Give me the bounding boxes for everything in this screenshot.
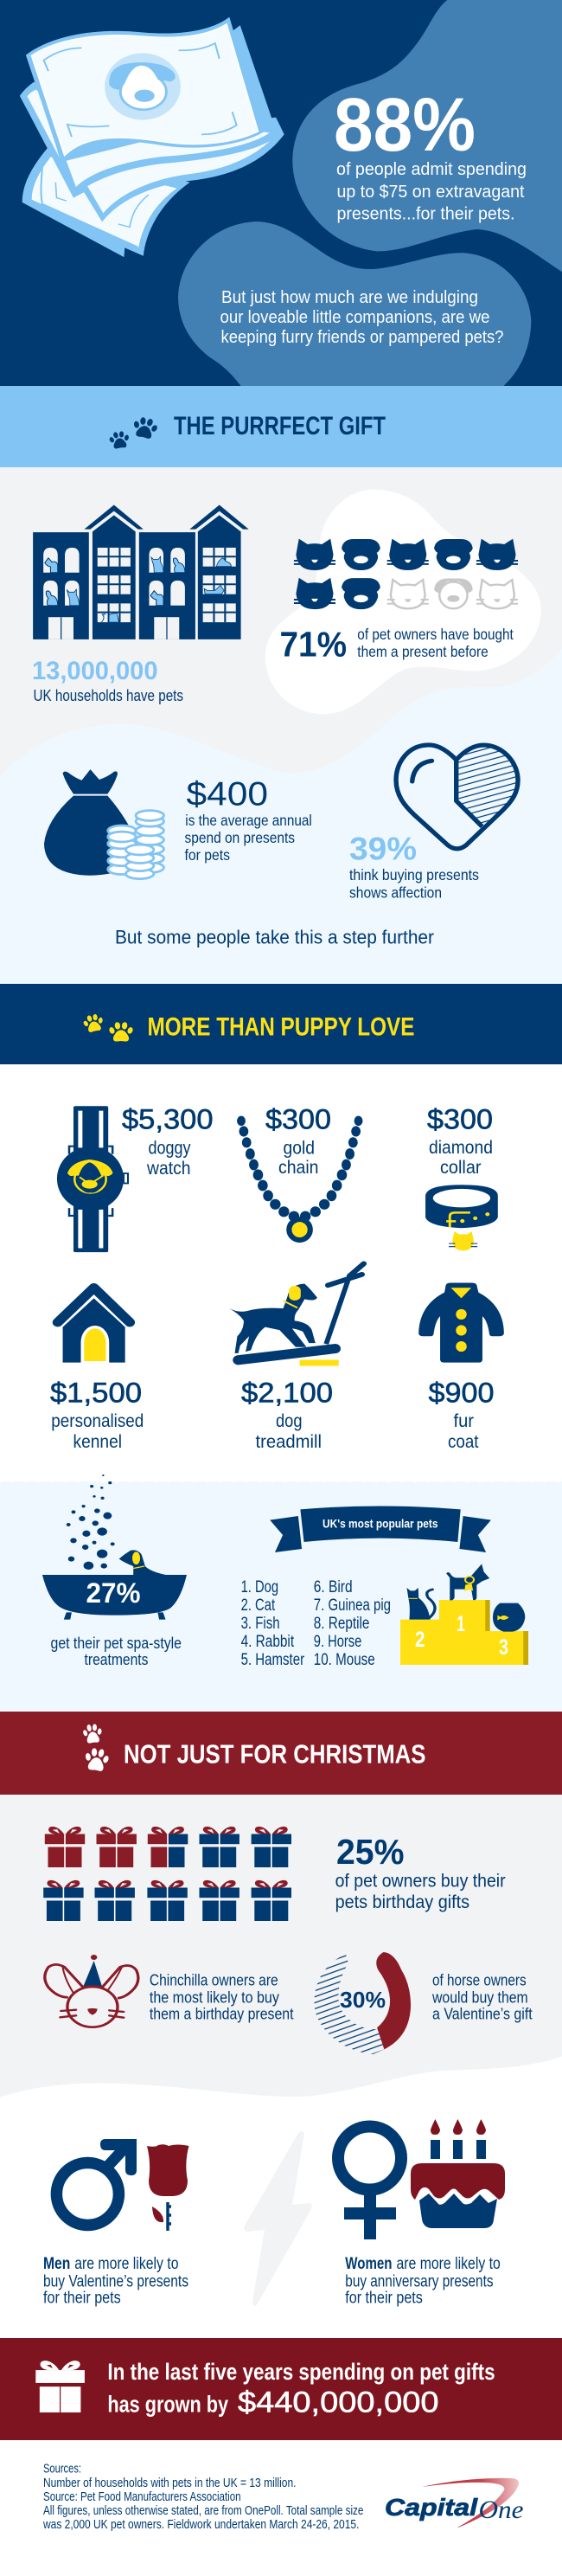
panel: luxury pet gifts	[0, 1064, 562, 1481]
panel: birthday and valentine stats	[0, 1795, 562, 2157]
icon: podium with pets: 1	[457, 1612, 465, 1636]
text: chinchilla owners: Chinchilla owners are	[150, 1971, 278, 1988]
transition sentence: But some people take this a step further	[115, 926, 434, 948]
stat: 400 dollars	[185, 775, 312, 864]
icon grid: cats and dogs 71 percent	[294, 539, 518, 609]
white blob	[265, 490, 541, 714]
stat: 25 percent: 25%	[336, 1832, 405, 1872]
icon: podium with pets: 3	[499, 1635, 508, 1660]
price: fur coat: fur	[453, 1410, 474, 1431]
price: diamond collar: diamond	[429, 1137, 493, 1158]
chart: 30 percent ring: 30%	[340, 1987, 386, 2013]
price: kennel: $1,500	[50, 1378, 142, 1409]
panel: sources: Source: Pet Food Manufacturers Association	[43, 2490, 241, 2504]
panel: sources: All figures, unless otherwise stated, are from OnePoll. Total sample size	[43, 2504, 363, 2518]
icon: half-hatched heart	[396, 745, 518, 849]
panel: sources: Sources:	[43, 2462, 81, 2476]
price: gold chain: chain	[278, 1157, 318, 1178]
price: gold chain	[265, 1104, 331, 1178]
panel: spa and popular pets	[0, 1474, 562, 1712]
text: horse owners: of horse owners	[432, 1971, 527, 1988]
panel: sources: Number of households with pets in the UK = 13 million.	[43, 2476, 296, 2490]
text: horse owners	[431, 1971, 533, 2022]
price: treadmill: treadmill	[256, 1431, 322, 1452]
ranked list of pets	[241, 1578, 391, 1669]
stat: 39 percent: shows affection	[349, 884, 442, 902]
icon: podium with pets	[400, 1564, 528, 1665]
ribbon banner: UK's most popular pets: UK's most popular pets	[323, 1516, 438, 1530]
text: women: Women	[345, 2255, 393, 2273]
price: kennel	[50, 1378, 144, 1452]
stat: 39 percent: 39%	[349, 831, 417, 867]
stat: 71 percent	[280, 625, 514, 665]
text: chinchilla owners	[150, 1971, 294, 2022]
text: women: are more likely to	[396, 2255, 501, 2273]
logo: Capital One: Capital	[385, 2494, 478, 2521]
icon: lightning bolt divider	[244, 2131, 312, 2306]
price: kennel: kennel	[73, 1431, 122, 1452]
price: gold chain: $300	[265, 1104, 331, 1135]
stat: 88 percent: presents...for their pets.	[337, 204, 515, 223]
ranked list of pets: 10. Mouse	[314, 1651, 375, 1669]
icon: white paws	[81, 1723, 111, 1772]
text: men: buy Valentine’s presents	[43, 2272, 188, 2290]
price: fur coat	[429, 1378, 495, 1452]
stat: 88 percent	[334, 83, 527, 223]
stat: 27 percent	[50, 1577, 182, 1668]
ranked list of pets: 2. Cat	[241, 1596, 276, 1615]
price: treadmill: $2,100	[241, 1378, 333, 1409]
icon: terrace of houses with pets	[33, 504, 249, 639]
stat: 25 percent: of pet owners buy their	[335, 1871, 506, 1892]
ranked list of pets: 7. Guinea pig	[314, 1596, 391, 1615]
price: treadmill: dog	[276, 1410, 303, 1431]
stat: 400 dollars: spend on presents	[185, 829, 295, 846]
stat: 13,000,000 households: UK households have pets	[33, 687, 183, 704]
panel: sources: was 2,000 UK pet owners. Fieldwork undertaken March 24-26, 2015.	[42, 2518, 359, 2532]
section heading: more than puppy love	[0, 984, 562, 1064]
stat: 71 percent: them a present before	[357, 643, 489, 660]
text: women: for their pets	[345, 2289, 423, 2307]
price: doggy watch	[122, 1104, 213, 1179]
growth text: has grown by	[107, 2391, 228, 2417]
text: men: are more likely to	[74, 2255, 178, 2273]
intro question: But just how much are we indulging	[221, 287, 478, 307]
growth text: In the last five years spending on pet gifts	[107, 2359, 495, 2385]
logo: Capital One: One	[479, 2496, 524, 2524]
stat: 25 percent: pets birthday gifts	[335, 1892, 469, 1912]
price: gold chain: gold	[284, 1137, 315, 1158]
icon: podium with pets: 2	[415, 1628, 425, 1652]
panel: sources	[42, 2462, 363, 2532]
stat: 39 percent: think buying presents	[349, 866, 479, 883]
text: horse owners: would buy them	[431, 1988, 528, 2006]
icon: red rose	[147, 2144, 188, 2231]
stat: 400 dollars: is the average annual	[185, 812, 312, 829]
text: men: Men	[43, 2255, 70, 2273]
icon: paws	[108, 415, 160, 449]
growth text	[107, 2359, 495, 2419]
price: doggy watch: watch	[146, 1158, 190, 1179]
text: women	[345, 2255, 501, 2307]
icon: white gift	[35, 2361, 85, 2412]
heading text: MORE THAN PUPPY LOVE	[147, 1012, 415, 1042]
stat: 39 percent	[349, 831, 479, 902]
stat: 27 percent: 27%	[86, 1577, 140, 1609]
icon: female symbol	[338, 2127, 401, 2239]
icon: stack of dog banknotes	[20, 17, 284, 257]
icon: yellow paws	[81, 1012, 134, 1042]
ranked list of pets: 5. Hamster	[241, 1651, 305, 1669]
icon: dog in bubble bath	[42, 1474, 187, 1620]
hero blobs	[178, 0, 562, 386]
ribbon banner: UK's most popular pets	[270, 1506, 491, 1552]
text: men: for their pets	[43, 2289, 121, 2307]
section heading: not just for christmas	[0, 1712, 562, 1795]
growth text: $440,000,000	[238, 2386, 439, 2419]
price: kennel: personalised	[51, 1410, 144, 1431]
icon: dog treadmill	[229, 1263, 364, 1366]
ranked list of pets: 9. Horse	[314, 1633, 361, 1651]
ranked list of pets: 6. Bird	[314, 1578, 353, 1596]
banner: spending growth	[0, 2338, 562, 2440]
icon grid: gifts 25 percent	[43, 1827, 291, 1921]
ranked list of pets: 8. Reptile	[314, 1615, 369, 1633]
stat: 25 percent	[335, 1832, 506, 1912]
ranked list of pets: 1. Dog	[241, 1578, 278, 1596]
price: doggy watch: $5,300	[122, 1104, 213, 1135]
logo: Capital One	[385, 2478, 524, 2528]
stat: 88 percent: up to $75 on extravagant	[337, 182, 525, 202]
intro question: our loveable little companions, are we	[220, 307, 489, 327]
stat: 88 percent: of people admit spending	[336, 159, 527, 179]
text: chinchilla owners: the most likely to buy	[150, 1988, 279, 2006]
stat: 71 percent: of pet owners have bought	[357, 626, 514, 643]
icon: fur coat	[418, 1282, 504, 1363]
icon: birthday cake	[411, 2119, 505, 2228]
section heading: the purrfect gift	[0, 386, 562, 467]
stat: 13,000,000 households	[32, 657, 183, 704]
text: chinchilla owners: them a birthday present	[150, 2005, 294, 2022]
icon: male symbol	[56, 2139, 137, 2226]
intro question: keeping furry friends or pampered pets?	[221, 327, 503, 347]
panel: purrfect gift stats	[0, 467, 562, 984]
icon: doggy watch	[57, 1106, 128, 1252]
stat: 88 percent: 88%	[334, 83, 476, 167]
stat: 13,000,000 households: 13,000,000	[32, 657, 157, 685]
heading text: NOT JUST FOR CHRISTMAS	[124, 1739, 425, 1769]
icon: money bag and coins	[44, 769, 163, 879]
price: diamond collar	[427, 1104, 493, 1178]
stat: 27 percent: treatments	[85, 1650, 149, 1668]
white wave	[0, 2057, 562, 2157]
text: horse owners: a Valentine’s gift	[432, 2005, 533, 2022]
panel: men versus women	[43, 2119, 505, 2307]
chart: 30 percent ring	[315, 1952, 411, 2054]
icon: diamond collar	[425, 1185, 498, 1250]
icon: gold chain	[237, 1116, 363, 1243]
price: doggy watch: doggy	[149, 1137, 191, 1158]
panel: hero intro	[0, 0, 562, 386]
price: fur coat: coat	[448, 1431, 479, 1452]
text: men	[43, 2255, 188, 2307]
stat: 71 percent: 71%	[280, 625, 347, 665]
intro question	[220, 287, 503, 347]
text: women: buy anniversary presents	[345, 2272, 493, 2290]
stat: 27 percent: get their pet spa-style	[50, 1634, 182, 1652]
ranked list of pets: 3. Fish	[241, 1615, 280, 1633]
price: fur coat: $900	[429, 1378, 495, 1409]
price: diamond collar: $300	[427, 1104, 493, 1135]
ranked list of pets: 4. Rabbit	[241, 1633, 295, 1651]
stat: 400 dollars: $400	[187, 775, 268, 813]
heading text: THE PURRFECT GIFT	[174, 412, 386, 440]
price: diamond collar: collar	[440, 1157, 481, 1178]
pale wave background	[0, 649, 562, 984]
stat: 400 dollars: for pets	[185, 846, 230, 864]
icon: chinchilla with party hat	[45, 1955, 138, 2027]
price: treadmill	[241, 1378, 333, 1452]
icon: personalised kennel	[58, 1288, 130, 1363]
